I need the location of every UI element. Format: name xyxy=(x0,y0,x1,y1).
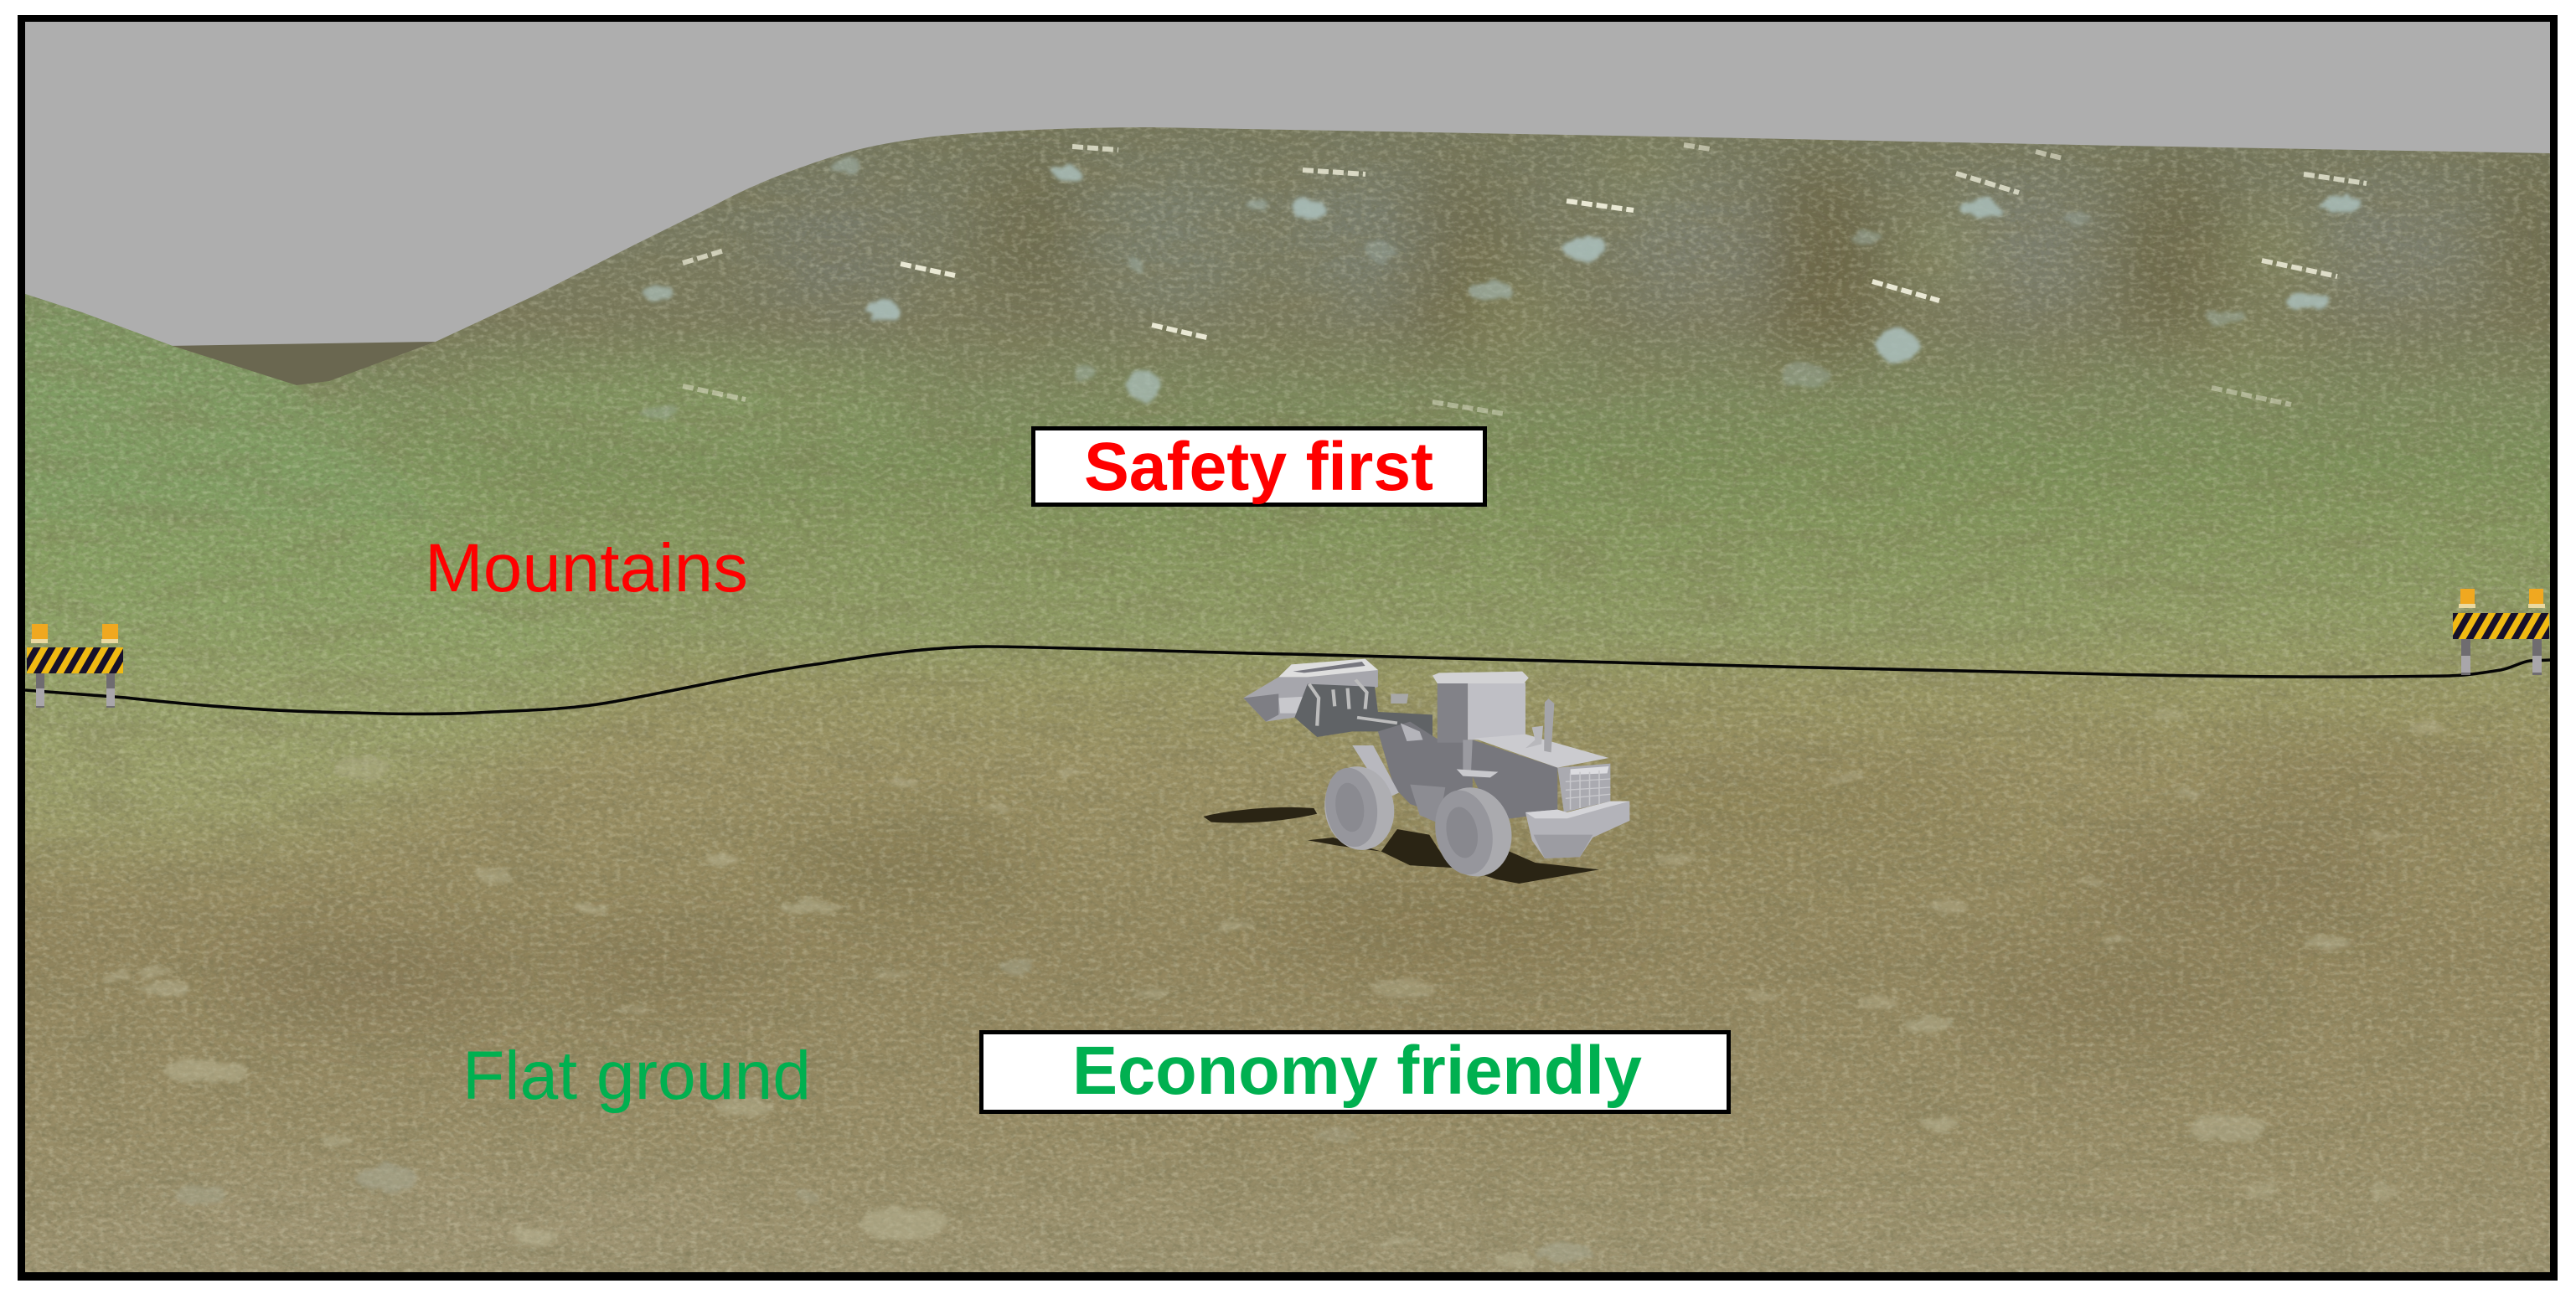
loader rear wheel xyxy=(1320,763,1399,853)
barrier: right xyxy=(2453,589,2549,675)
loader shadows xyxy=(1203,807,1599,884)
loader fender xyxy=(1352,745,1399,798)
callout: Safety first: Safety first xyxy=(1084,429,1433,505)
boundary line between mountains and flat ground xyxy=(25,647,2550,714)
loader arms xyxy=(1294,680,1433,743)
loader hood xyxy=(1471,735,1610,821)
loader exhaust xyxy=(1525,698,1554,752)
pale ground spots xyxy=(100,709,2442,1269)
rock spots xyxy=(640,160,2362,419)
loader front wheel xyxy=(1429,783,1518,881)
left hill crest xyxy=(25,294,436,519)
left slope xyxy=(0,276,620,846)
loader bucket xyxy=(1243,659,1378,722)
distant valley ridge xyxy=(168,342,436,387)
icon: wheel loader xyxy=(1203,659,1629,884)
loader counterweight xyxy=(1525,802,1629,858)
barrier: left xyxy=(27,624,123,708)
loader cab xyxy=(1433,672,1529,771)
callout: Economy friendly: Economy friendly xyxy=(1072,1033,1642,1109)
loader body xyxy=(1378,722,1473,823)
white rock dashes xyxy=(683,145,2367,414)
sky xyxy=(25,22,2550,350)
label: Mountains: Mountains xyxy=(425,530,748,606)
rock band stains xyxy=(271,152,2550,1028)
label: Flat ground: Flat ground xyxy=(462,1038,811,1114)
loader step xyxy=(1457,769,1498,777)
